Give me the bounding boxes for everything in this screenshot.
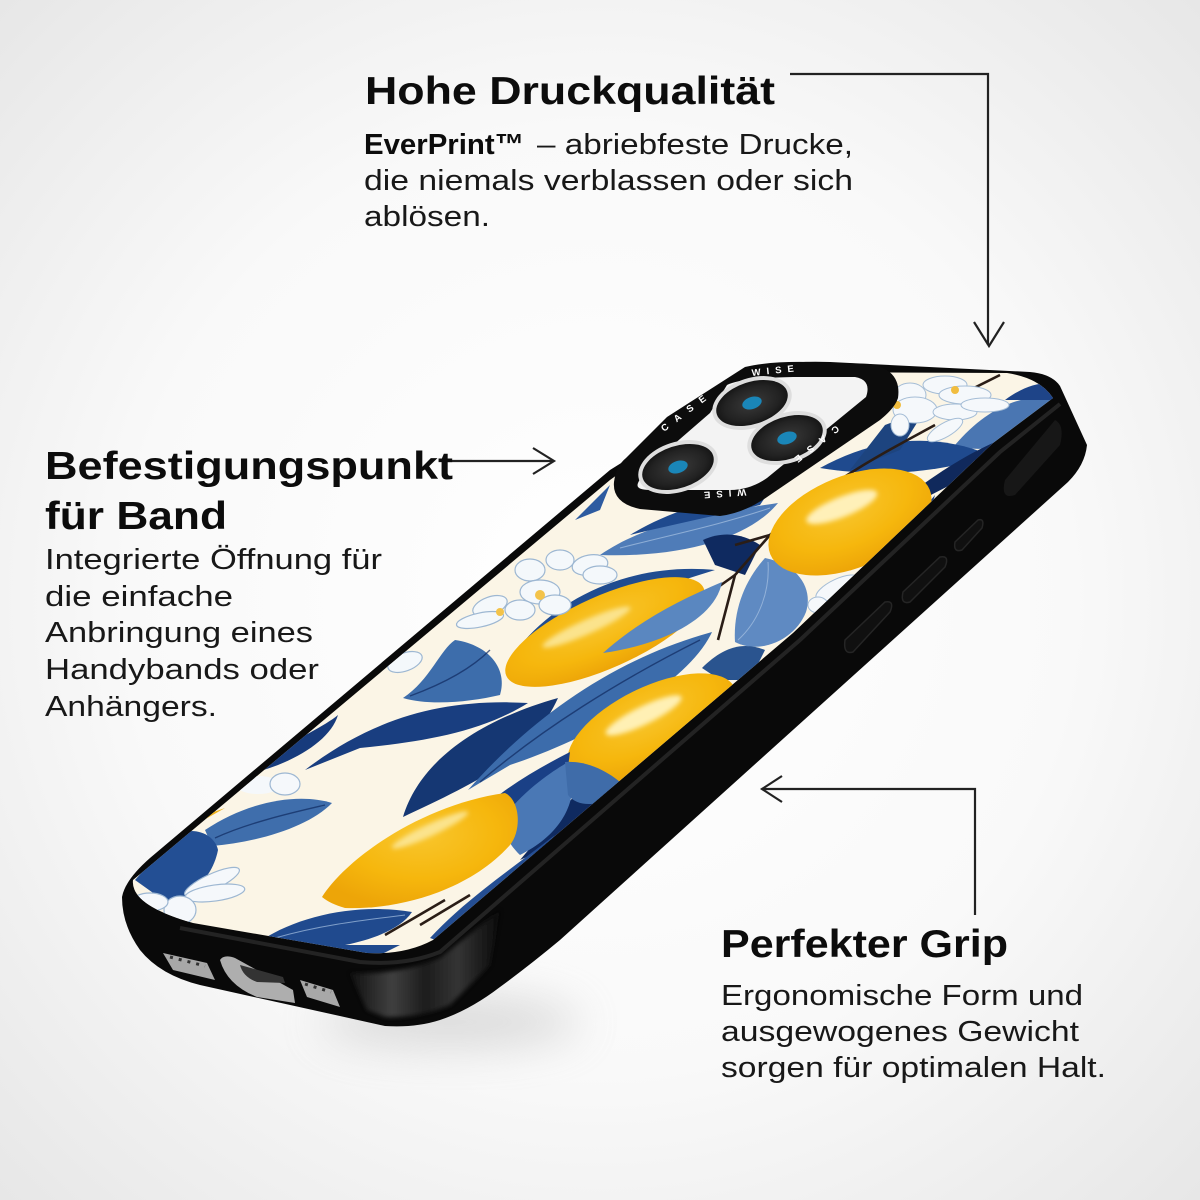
text block: EverPrint: die niemals verblassen oder sich xyxy=(364,165,853,197)
top left leaf stripe xyxy=(264,715,338,770)
heading: Befestigungspunkt für Band xyxy=(45,445,453,538)
phone case xyxy=(122,362,1087,1026)
top right flowers xyxy=(891,376,1009,446)
camera glass xyxy=(638,377,868,490)
lower right leaves xyxy=(262,835,555,960)
left flowers xyxy=(385,550,617,677)
lemon four xyxy=(322,793,518,908)
phone shadow xyxy=(320,996,580,1048)
text block: Band description: die einfache xyxy=(45,581,233,613)
text block: Band description: Integrierte Öffnung für xyxy=(45,544,382,576)
text block: Grip description xyxy=(721,980,1106,1084)
bezel highlight xyxy=(180,404,1060,963)
cream base xyxy=(120,360,1070,970)
camera ring xyxy=(614,362,898,516)
speaker grille right xyxy=(300,980,340,1007)
central leaves xyxy=(305,632,712,817)
lens top xyxy=(705,367,799,439)
case artwork: lemons and leaves xyxy=(120,360,1070,970)
lens right xyxy=(740,402,834,474)
heading: Befestigungspunkt für Band: Befestigungspunkt xyxy=(45,445,453,488)
lemon two xyxy=(505,577,704,687)
ring text: CASE xyxy=(785,423,841,470)
side buttons xyxy=(845,420,1062,652)
glossy corner xyxy=(350,910,500,1017)
case body xyxy=(122,362,1087,1026)
text block: Band description: Anbringung eines xyxy=(45,617,313,649)
bottom left flower xyxy=(132,773,300,924)
text block: Band description: Handybands oder xyxy=(45,654,319,686)
heading: Befestigungspunkt für Band: für Band xyxy=(45,495,227,538)
lens left xyxy=(631,431,725,503)
leaf over lemon two xyxy=(603,582,722,653)
text block: EverPrint: ablösen. xyxy=(364,201,490,233)
text block: EverPrint xyxy=(364,129,853,233)
upper big leaves xyxy=(600,490,808,680)
text block: Grip description: ausgewogenes Gewicht xyxy=(721,1016,1079,1048)
small flower near lemon one xyxy=(808,574,854,613)
branches xyxy=(385,375,1000,935)
lemon one xyxy=(768,468,932,576)
heading: Perfekter Grip: Perfekter Grip xyxy=(721,923,1008,966)
text block: Grip description: sorgen für optimalen Halt. xyxy=(721,1052,1106,1084)
top right leaves xyxy=(820,384,1053,511)
speaker grille left xyxy=(163,953,215,980)
small leaf near camera xyxy=(575,485,610,520)
text block: Grip description: Ergonomische Form und xyxy=(721,980,1083,1012)
lemon two back leaf xyxy=(525,569,715,640)
lower central leaves xyxy=(500,752,619,860)
heading: Hohe Druckqualität: Hohe Druckqualität xyxy=(365,70,775,113)
ring text xyxy=(659,363,841,500)
lemon three xyxy=(568,673,733,782)
bottom left leaves xyxy=(135,799,332,905)
text block: Band description: Anhängers. xyxy=(45,691,217,723)
text block: EverPrint: – abriebfeste Drucke, xyxy=(537,129,853,161)
ring text: CASE xyxy=(659,388,716,434)
arrow: lanyard point xyxy=(445,448,554,474)
camera module xyxy=(614,362,898,516)
port opening xyxy=(240,965,285,983)
arrow: grip xyxy=(762,776,975,915)
text block: Band description xyxy=(45,544,382,723)
text block: EverPrint: EverPrint™ xyxy=(364,129,524,161)
ring text: WISE xyxy=(751,363,800,379)
ring text: WISE xyxy=(698,486,747,500)
charging port xyxy=(220,956,295,1003)
arrow: print quality xyxy=(790,74,1004,346)
